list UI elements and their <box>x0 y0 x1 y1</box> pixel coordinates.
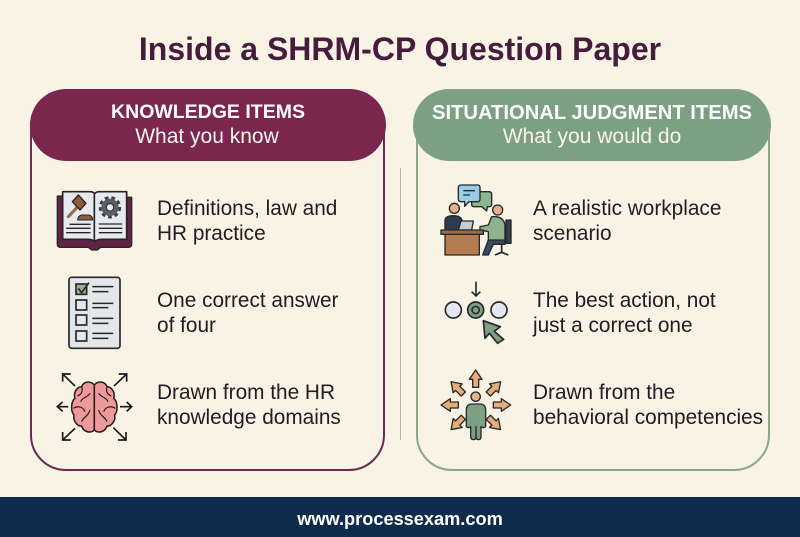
text: HR knowledge domains: Drawn from the HR <box>157 381 335 404</box>
header subtitle: What you know <box>135 125 279 148</box>
text: best action <box>532 289 716 337</box>
text: one correct answer: One correct answer <box>157 289 338 312</box>
text: HR knowledge domains <box>157 381 341 429</box>
header title: KNOWLEDGE ITEMS <box>111 101 305 123</box>
header subtitle: What you would do <box>503 125 681 148</box>
title: Inside a SHRM-CP Question Paper <box>139 31 661 67</box>
header title: SITUATIONAL JUDGMENT ITEMS <box>432 102 752 124</box>
text: one correct answer <box>157 289 338 337</box>
text: behavioral competencies: Drawn from the <box>533 381 675 404</box>
text: workplace scenario <box>533 197 721 245</box>
text: HR knowledge domains: knowledge domains <box>157 406 341 429</box>
text: definitions: Definitions, law and <box>157 197 337 220</box>
text: workplace scenario: A realistic workplace <box>533 197 721 220</box>
text: behavioral competencies: behavioral competencies <box>533 406 763 429</box>
panel: situational judgment items <box>413 89 771 471</box>
center divider <box>400 168 401 440</box>
text: workplace scenario: scenario <box>533 222 612 245</box>
header: knowledge items <box>30 89 386 161</box>
icon: multiple-choice checklist <box>68 276 121 350</box>
icon: brain with radiating arrows <box>56 373 133 441</box>
footer bar <box>0 497 800 537</box>
header: situational judgment items <box>413 89 771 161</box>
text: definitions <box>157 197 337 245</box>
panel outline: situational <box>416 90 770 471</box>
icon: workplace conversation at desk <box>440 184 512 256</box>
icon: law book with gavel and gear <box>56 190 132 251</box>
text: one correct answer: of four <box>157 314 216 337</box>
icon: person with competency arrows <box>440 369 512 440</box>
panel: knowledge items <box>30 89 386 471</box>
text: best action: just a correct one <box>533 314 693 337</box>
footer url: www.processexam.com <box>297 509 503 529</box>
icon: best-choice target and cursor <box>444 282 508 344</box>
panel outline: knowledge <box>30 90 385 471</box>
text: definitions: HR practice <box>157 222 266 245</box>
text: best action: The best action, not <box>533 289 716 312</box>
text: behavioral competencies <box>533 381 763 429</box>
